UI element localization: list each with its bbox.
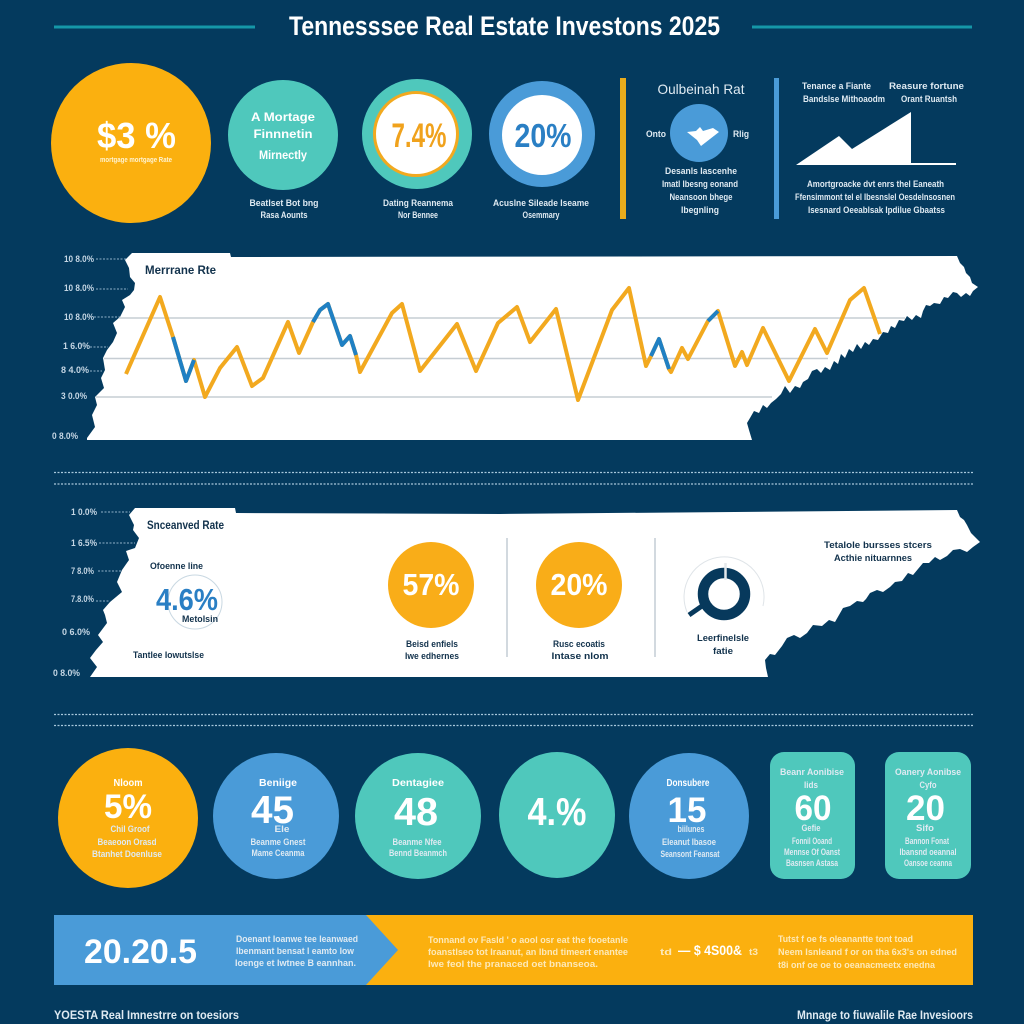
- banner: blue arrow segment: Ioenge et Iwtnee B eannhan.: [235, 958, 356, 968]
- panel: outbreak rate: Oulbeinah Rat: [658, 81, 745, 97]
- stat: teal mortgage circle: Rasa Aounts: [260, 210, 308, 220]
- axis labels: [53, 507, 135, 678]
- panel: growth chart: [774, 78, 964, 219]
- panel: growth chart: Isesnard Oeeablsak Ipdilue Gbaatss: [808, 205, 945, 215]
- panel: bottom statistics: [58, 748, 971, 888]
- stat: 15: 15: [668, 791, 706, 830]
- card: 20: Oanery Aonibse: [895, 767, 961, 777]
- axis labels: 1 6.0%: [63, 341, 90, 351]
- stat: 5 percent: 5%: [104, 788, 152, 826]
- banner: blue arrow segment: Ibenmant bensat l eamto Iow: [236, 946, 355, 956]
- panel: mortgage rate chart: [52, 253, 978, 441]
- panel: growth chart: Bandslse Mithoaodm: [803, 94, 885, 104]
- axis labels: 7 8.0%: [71, 566, 94, 576]
- stat: 7.4 percent ring: Nor Bennee: [398, 210, 438, 220]
- stat: 20 percent ring: Osemmary: [522, 210, 560, 220]
- panel: growth chart: Reasure fortune: [889, 81, 964, 91]
- stat: 5 percent: Btanhet Doenluse: [92, 849, 162, 859]
- card: 20: [885, 752, 971, 879]
- map: Tennessee shape: [87, 253, 978, 440]
- banner: amber segment: foanstlseo tot Iraanut, an Ibnd timeert enantee: [428, 947, 628, 957]
- banner: amber segment: [366, 915, 973, 985]
- stat: 4 percent: 4.%: [528, 791, 586, 834]
- stat: 48: Bennd Beanmch: [389, 848, 447, 858]
- card: 60: Fonnil Ooand: [792, 836, 832, 846]
- dotted separators: [54, 472, 974, 726]
- axis labels: 8 4.0%: [61, 365, 89, 375]
- panel: growth chart: Amortgroacke dvt enrs thel Eaneath: [807, 179, 944, 189]
- line chart: [126, 288, 880, 400]
- stat: teal mortgage circle: [228, 80, 338, 220]
- header: [54, 11, 972, 41]
- banner: [54, 915, 973, 985]
- stat: 5 percent: [58, 748, 198, 888]
- card: 60: [770, 752, 855, 879]
- footer left: YOESTA Real Imnestrre on toesiors: [54, 1010, 239, 1022]
- stat: 57 percent: Beisd enfiels: [406, 639, 458, 649]
- panel: outbreak rate: Neansoon bhege: [670, 192, 732, 202]
- stat: 20 percent ring: Acuslne Sileade Iseame: [493, 198, 589, 208]
- axis labels: 1 6.5%: [71, 538, 97, 548]
- banner: amber segment: — $ 4S00&: [678, 942, 742, 958]
- stat: 20 percent: [536, 542, 622, 661]
- stat: 20 percent: 20%: [550, 567, 608, 602]
- banner: blue arrow segment: [54, 915, 398, 985]
- card: 60: Iids: [804, 780, 818, 790]
- stat: 7.4 percent ring: Dating Reannema: [383, 198, 454, 208]
- card: 60: 60: [794, 789, 832, 828]
- card: 60: Mennse Of Oanst: [784, 847, 840, 857]
- stat: 20 percent ring: [489, 81, 595, 220]
- card: 20: Bannon Fonat: [905, 836, 949, 846]
- axis labels: 0 8.0%: [52, 431, 78, 441]
- panel: outbreak rate: Imatl Ibesng eonand: [662, 179, 738, 189]
- stat: 57 percent: [388, 542, 474, 661]
- axis labels: 10 8.0%: [64, 283, 94, 293]
- stat: 15: biilunes: [678, 824, 704, 834]
- card: 60: Beanr Aonibise: [780, 767, 844, 777]
- stat: 15: Donsubere: [666, 777, 710, 789]
- stat: 48: [355, 753, 481, 879]
- panel: secondary rate: Snceanved Rate: [147, 518, 224, 532]
- stat: 4.6 percent: 4.6%: [156, 582, 218, 617]
- card: 20: 20: [906, 789, 945, 828]
- stat: teal mortgage circle: Mirnectly: [259, 148, 307, 162]
- axis labels: [52, 254, 128, 441]
- axis labels: 1 0.0%: [71, 507, 97, 517]
- banner: amber segment: Tutst f oe fs oleanantte tont toad: [778, 934, 913, 944]
- axis labels: 3 0.0%: [61, 391, 87, 401]
- icon: donut gauge: [684, 557, 764, 656]
- panel: outbreak rate: [620, 78, 749, 219]
- banner: amber segment: t3: [749, 947, 758, 957]
- stat: 4.6 percent: Tantlee Iowutslse: [133, 650, 204, 660]
- panel: outbreak rate: Ibegnling: [681, 205, 719, 215]
- stat: 7.4 percent ring: [362, 79, 472, 220]
- stat: 45: Ele: [274, 824, 290, 834]
- axis labels: 10 8.0%: [64, 254, 94, 264]
- banner: amber segment: Tonnand ov Fasld ' o aool osr eat the fooetanle: [428, 935, 628, 945]
- stat: 48: 48: [394, 791, 438, 834]
- panel: mortgage rate chart: Merrrane Rte: [145, 263, 216, 277]
- icon: bird in blue circle: [670, 104, 728, 162]
- map: Tennessee shape: [90, 508, 980, 677]
- text block: right note: Tetalole bursses stcers: [824, 540, 932, 550]
- icon: donut gauge: fatie: [713, 646, 733, 656]
- stat: 57 percent: 57%: [402, 567, 460, 602]
- stat: teal mortgage circle: Beatlset Bot bng: [250, 198, 318, 208]
- icon: donut gauge: Leerfinelsle: [697, 633, 749, 643]
- card: 20: Sifo: [916, 823, 935, 833]
- stat: 20 percent: Intase nlom: [552, 651, 608, 661]
- stat: 4.6 percent: [133, 561, 222, 660]
- panel: outbreak rate: Desanls Iascenhe: [665, 166, 737, 176]
- footer right: Mnnage to fiuwalile Rae Invesioors: [797, 1010, 973, 1022]
- axis labels: 0 6.0%: [62, 627, 90, 637]
- stat: 45: Beniige: [259, 777, 297, 789]
- stat: 45: Beanme Gnest: [250, 837, 306, 847]
- banner: amber segment: td: [660, 947, 672, 957]
- banner: amber segment: t8i onf oe oe to oeanacmeetx enedna: [778, 960, 936, 970]
- axis labels: 10 8.0%: [64, 312, 94, 322]
- panel: growth chart: Tenance a Fiante: [802, 81, 871, 91]
- stat: 4.6 percent: Ofoenne line: [150, 561, 203, 571]
- text block: right note: [824, 540, 932, 563]
- banner: blue arrow segment: 20.20.5: [84, 933, 197, 971]
- stat: large amber circle: mortgage mortgage Rate: [100, 155, 172, 164]
- panel: top statistics: [51, 63, 595, 223]
- card: 60: Basnsen Astasa: [786, 858, 839, 868]
- stat: 15: Eleanut Ibasoe: [662, 837, 716, 847]
- chart: white mountain area: [796, 112, 956, 165]
- stat: 5 percent: Nloom: [114, 778, 143, 789]
- stat: teal mortgage circle: A Mortage: [251, 110, 315, 124]
- stat: 20 percent: Rusc ecoatis: [553, 639, 605, 649]
- card: 20: Oansoe ceanna: [904, 858, 953, 868]
- stat: 57 percent: Iwe edhernes: [405, 651, 459, 661]
- panel: growth chart: Ffensimmont tel el Ibesnslel Oesdelnsosnen: [795, 192, 955, 202]
- stat: 45: [213, 753, 339, 879]
- text block: right note: Acthie nituarnnes: [834, 553, 912, 563]
- axis labels: 0 8.0%: [53, 668, 80, 678]
- stat: large amber circle: $3 %: [97, 115, 176, 156]
- stat: 15: Seansont Feansat: [660, 849, 720, 859]
- stat: 4 percent: [499, 752, 615, 878]
- panel: outbreak rate: Onto: [646, 129, 666, 139]
- stat: 45: 45: [251, 789, 294, 832]
- stat: 48: Dentagiee: [392, 777, 444, 789]
- stat: 20 percent ring: 20%: [514, 117, 572, 154]
- stat: teal mortgage circle: Finnnetin: [254, 127, 312, 141]
- panel: secondary rate: [53, 507, 980, 678]
- stat: large amber circle: [51, 63, 211, 223]
- card: 60: Gefie: [802, 823, 820, 833]
- banner: blue arrow segment: Doenant Ioanwe tee Ieanwaed: [236, 934, 358, 944]
- card: 20: Cyfo: [920, 780, 937, 790]
- title: Tennesssee Real Estate Investons 2025: [289, 11, 720, 41]
- banner: amber segment: Iwe feol the pranaced oet bnanseoa.: [428, 959, 598, 969]
- stat: 7.4 percent ring: 7.4%: [392, 117, 446, 155]
- stat: 45: Mame Ceanma: [252, 848, 305, 858]
- panel: growth chart: Orant Ruantsh: [901, 94, 957, 104]
- stat: 4.6 percent: Metolsin: [182, 614, 218, 624]
- stat: 5 percent: Beaeoon Orasd: [98, 837, 156, 847]
- stat: 15: [629, 753, 749, 879]
- banner: amber segment: Neem Isnleand f or on tha 6x3's on edned: [778, 947, 957, 957]
- axis labels: 7.8.0%: [71, 594, 94, 604]
- panel: outbreak rate: Rlig: [733, 129, 749, 139]
- stat: 5 percent: Chil Groof: [110, 824, 150, 834]
- card: 20: Ibansnd oeannal: [900, 847, 956, 857]
- stat: 48: Beanme Nfee: [392, 837, 442, 847]
